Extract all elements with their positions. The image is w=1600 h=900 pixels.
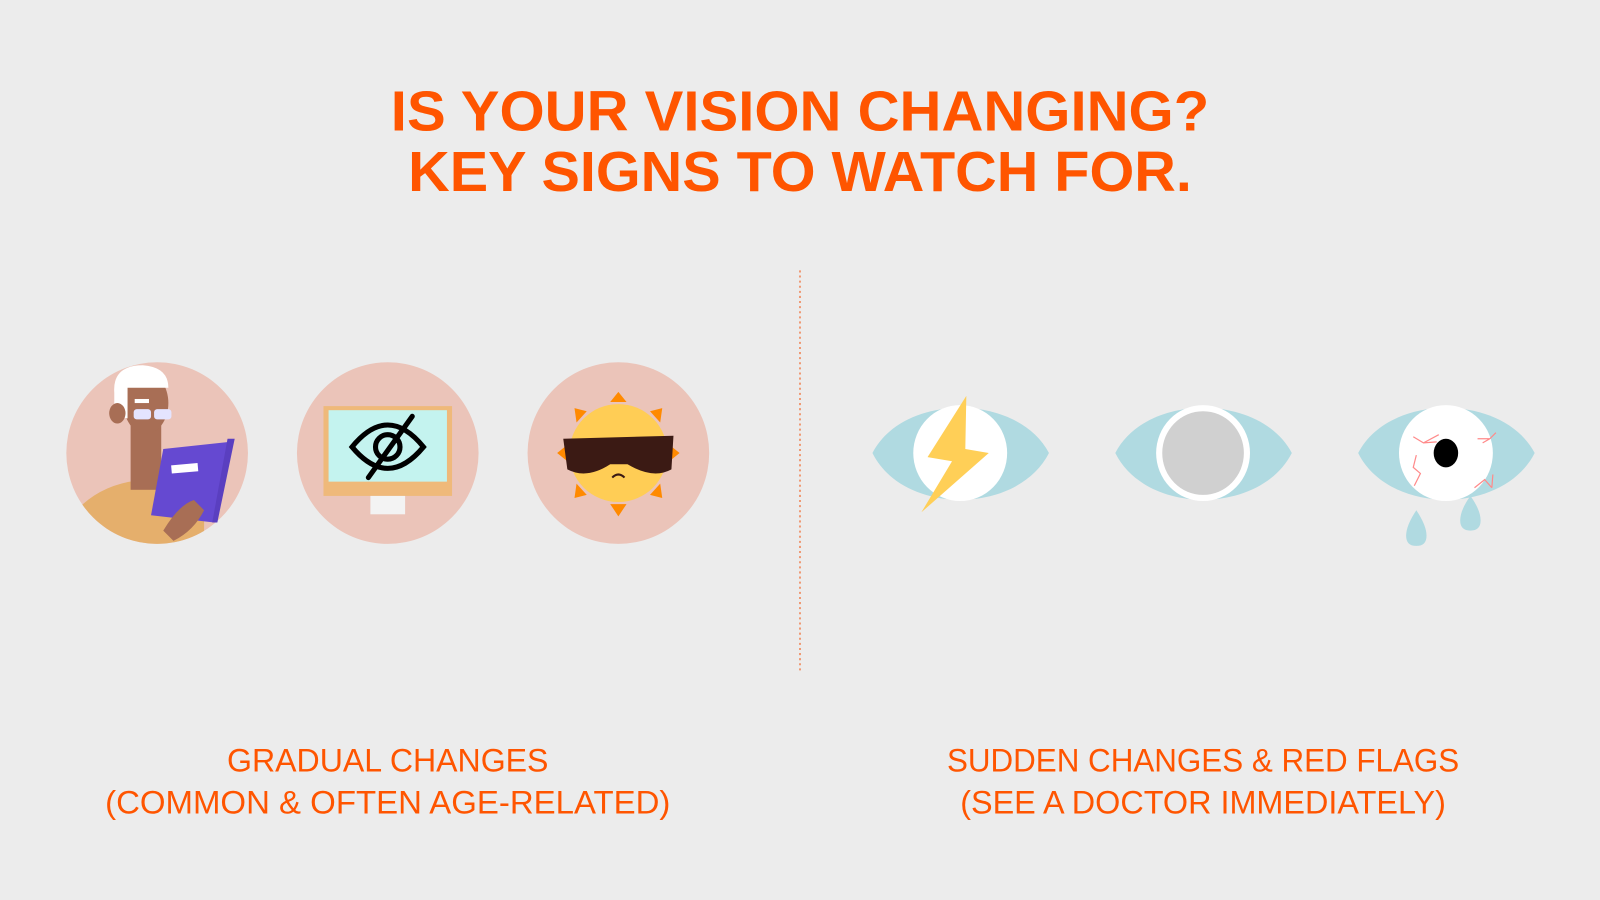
caption: sudden changes: SUDDEN CHANGES & RED FLAGS: [947, 741, 1459, 778]
panel: sudden changes icons: [872, 396, 1535, 546]
caption: sudden changes: [947, 741, 1459, 820]
caption: gradual changes: [105, 741, 670, 820]
icon: eye with cloudy lens: [1115, 405, 1292, 501]
title: [391, 80, 1209, 203]
caption: sudden changes: (SEE A DOCTOR IMMEDIATELY): [960, 783, 1446, 820]
icon: monitor with crossed eye: [297, 362, 479, 544]
caption: gradual changes: GRADUAL CHANGES: [227, 741, 548, 778]
icon: sun with sunglasses: [528, 362, 709, 544]
panel: gradual changes icons: [61, 362, 709, 551]
title: IS YOUR VISION CHANGING?: [391, 80, 1209, 143]
icon: man reading: [61, 362, 248, 551]
caption: gradual changes: (COMMON & OFTEN AGE-RELATED): [105, 783, 670, 820]
title: KEY SIGNS TO WATCH FOR.: [408, 140, 1192, 203]
icon: red teary eye: [1358, 405, 1535, 546]
icon: eye with lightning: [872, 396, 1049, 512]
